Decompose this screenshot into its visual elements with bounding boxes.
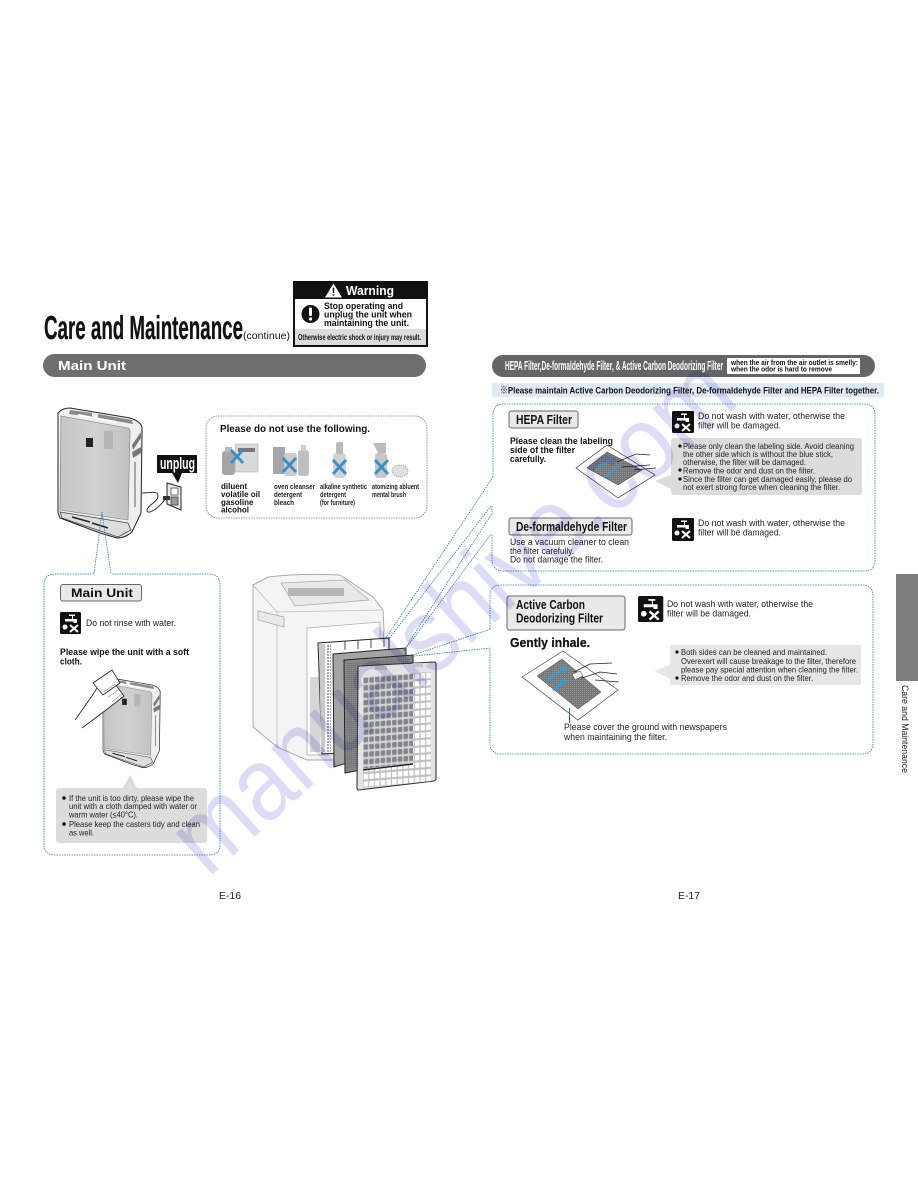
callout: dirty unit tips: unit with a cloth damped with water or (69, 801, 197, 811)
page number: right: E-17 (678, 891, 700, 902)
warning box: unplug the unit when (324, 310, 412, 320)
panel: main unit care: Do not rinse with water. (86, 618, 176, 628)
panel: please do not use: oven cleanser (274, 482, 315, 491)
callout: hepa tips: Since the filter can get damaged easily, please do (683, 474, 852, 484)
panel: hepa and de-formaldehyde: side of the filter (510, 445, 575, 456)
illustration: air purifier, front view (58, 408, 142, 538)
icon: unplug label and wall outlet (142, 455, 197, 512)
callout lines: unit to panel (94, 512, 111, 574)
page number: left: E-16 (219, 891, 241, 902)
icon: no water (672, 518, 694, 541)
newspaper leader and note: Please cover the ground with newspapers (564, 722, 727, 733)
panel: please do not use: alcohol (221, 506, 249, 514)
warning box (293, 281, 428, 347)
panel: please do not use: gasoline (221, 498, 254, 507)
button: active carbon: Deodorizing Filter (516, 612, 603, 626)
button: hepa filter (509, 411, 578, 428)
panel: hepa and de-formaldehyde: Do not wash with water, otherwise the (698, 411, 845, 422)
button: main unit: Main Unit (71, 586, 133, 600)
panel: hepa and de-formaldehyde: Please clean the labeling (510, 436, 613, 447)
panel: hepa and de-formaldehyde: carefully. (510, 454, 546, 465)
icon: unplug label and wall outlet: unplug (160, 455, 195, 473)
panel: hepa and de-formaldehyde: Do not damage the filter. (510, 554, 603, 566)
warning box: Stop operating and (324, 301, 403, 311)
filter: front grille (357, 662, 436, 790)
panel: hepa and de-formaldehyde: Do not wash with water, otherwise the (698, 518, 845, 529)
panel: active carbon filter (490, 585, 873, 754)
callout: dirty unit tips (56, 775, 207, 843)
newspaper leader and note (563, 708, 727, 743)
panel: main unit care: Please wipe the unit with a soft (60, 647, 190, 658)
panel: main unit care: cloth. (60, 656, 82, 668)
icon: cleanser bottles (273, 445, 309, 476)
title: Care and Maintenance (44, 309, 243, 346)
heading bar: filters: when the air from the air outlet is smelly: (730, 358, 858, 367)
panel: please do not use: detergent (274, 490, 302, 499)
callout: hepa tips: Please only clean the labeling side. Avoid cleaning (683, 441, 854, 451)
warning box: Warning (346, 283, 394, 298)
callout: carbon tips: Remove the odor and dust on the filter. (681, 673, 813, 683)
filter: de-formaldehyde (333, 648, 406, 767)
callout: dirty unit tips: Please keep the casters tidy and clean (69, 819, 200, 829)
heading bar: filters: when the odor is hard to remove (730, 364, 832, 374)
panel: please do not use: (for furniture) (320, 498, 355, 507)
illustration: wiping unit with cloth (75, 670, 160, 768)
callout: carbon tips: Both sides can be cleaned and maintained. (681, 647, 827, 657)
callout lines: filters to panels (386, 477, 493, 656)
icon: no water (638, 596, 663, 622)
button: hepa filter: HEPA Filter (516, 413, 572, 427)
callout: hepa tips: the other side which is without the blue stick, (683, 449, 833, 459)
title: (continue) (243, 331, 290, 342)
side tab (896, 574, 918, 773)
button: de-formaldehyde filter (509, 518, 632, 535)
icon: exclamation mark (302, 305, 320, 323)
panel: hepa and de-formaldehyde: filter will be damaged. (698, 528, 781, 538)
panel: active carbon filter: Gently inhale. (510, 635, 590, 650)
icon: solvent bottles (222, 444, 258, 475)
illustration: vacuuming carbon filter (522, 651, 619, 720)
newspaper leader and note: when maintaining the filter. (563, 732, 667, 743)
callout: carbon tips (654, 645, 861, 685)
icon: spray bottle and brush (373, 443, 408, 478)
filter: hepa (318, 638, 389, 754)
icon: no water (672, 411, 694, 433)
panel: please do not use: atomizing abluent (372, 482, 419, 491)
warning box: maintaining the unit. (324, 318, 409, 328)
heading bar: main unit (43, 354, 426, 377)
panel: please do not use: mental brush (372, 490, 406, 499)
icon: warning triangle (325, 284, 342, 298)
panel: please do not use: Please do not use the following. (220, 423, 370, 435)
panel: please do not use (206, 416, 427, 518)
callout: hepa tips: not exert strong force when cleaning the filter. (683, 482, 840, 492)
panel: please do not use: volatile oil (221, 490, 260, 499)
watermark: manualshive.com (146, 333, 757, 896)
button: active carbon (507, 596, 625, 630)
illustration: unit with filters exploded (253, 574, 436, 790)
callout: hepa tips (655, 438, 862, 495)
filter: carbon (344, 655, 413, 773)
panel: hepa and de-formaldehyde (492, 404, 875, 571)
panel: active carbon filter: filter will be damaged. (667, 608, 751, 620)
unit body (253, 574, 384, 760)
callout: carbon tips: please pay special attention when cleaning the filter. (681, 664, 858, 674)
panel: main unit care (44, 574, 220, 855)
panel: please do not use: detergent (320, 490, 346, 499)
callout: dirty unit tips: If the unit is too dirty, please wipe the (69, 793, 194, 803)
panel: hepa and de-formaldehyde: filter will be damaged. (698, 420, 781, 432)
button: main unit (60, 584, 142, 601)
panel: active carbon filter: Do not wash with water, otherwise the (667, 599, 813, 610)
button: active carbon: Active Carbon (516, 598, 585, 612)
callout: dirty unit tips: as well. (69, 828, 94, 838)
panel: please do not use: alkaline synthetic (320, 482, 367, 491)
panel: please do not use: diluent (221, 482, 248, 491)
icon: synthetic detergent bottle (333, 442, 346, 478)
icon: no water (60, 612, 81, 634)
heading bar: main unit: Main Unit (58, 358, 127, 373)
warning box: Otherwise electric shock or injury may result. (298, 332, 421, 342)
panel: hepa and de-formaldehyde: Use a vacuum cleaner to clean (510, 537, 629, 548)
callout: dirty unit tips: warm water (≤40°C). (68, 810, 138, 820)
callout: hepa tips: Remove the odor and dust on the filter. (683, 466, 815, 476)
panel: please do not use: bleach (274, 498, 294, 507)
callout: hepa tips: otherwise, the filter will be damaged. (683, 457, 806, 467)
panel: hepa and de-formaldehyde: the filter carefully. (510, 546, 574, 557)
side tab: Care and Maintenance (900, 685, 910, 773)
callout: carbon tips: Overexert will cause breakage to the filter, therefore (681, 656, 856, 666)
illustration: cleaning hepa filter (576, 445, 656, 498)
heading bar: filters (492, 355, 875, 377)
button: de-formaldehyde filter: De-formaldehyde Filter (516, 520, 627, 534)
